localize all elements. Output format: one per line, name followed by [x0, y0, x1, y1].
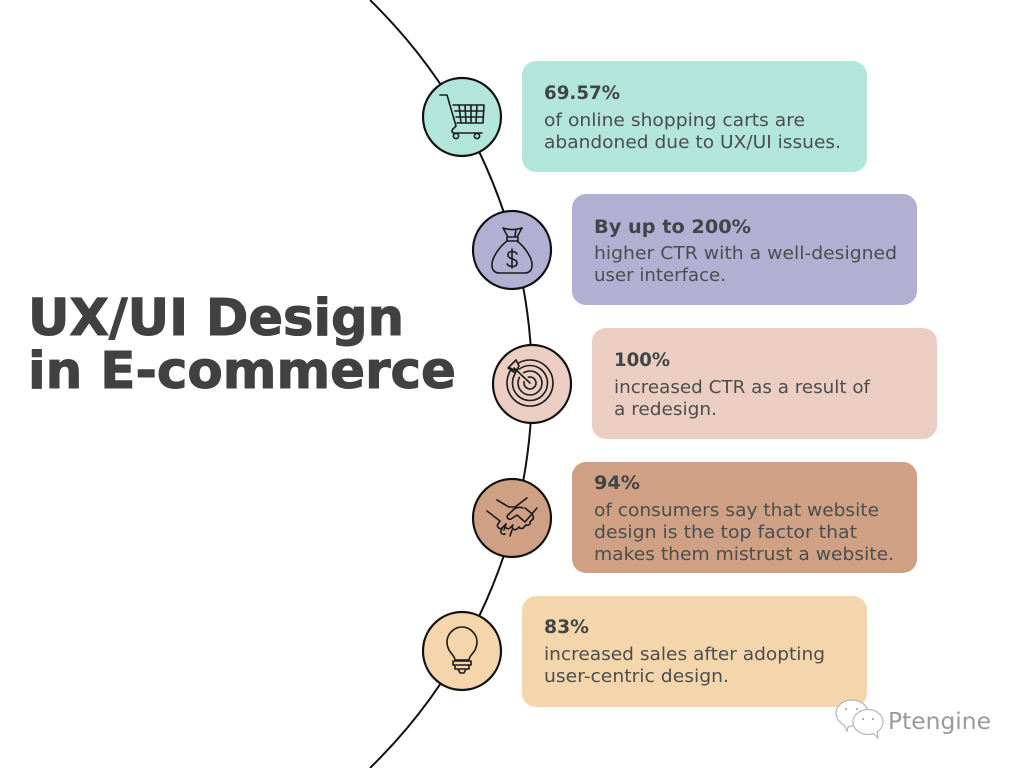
panel: cart abandonment: 69.57% [544, 82, 620, 104]
panel: higher CTR [572, 194, 917, 305]
panel: cart abandonment: of online shopping carts are [544, 111, 805, 131]
panel: higher CTR: By up to 200% [594, 216, 751, 238]
panel: consumer mistrust: 94% [594, 472, 640, 494]
title: in E-commerce [28, 342, 456, 401]
title: UX/UI Design [28, 289, 404, 348]
icon: shopping cart [423, 78, 501, 156]
icon: money bag [473, 211, 551, 289]
panel: increased sales: user-centric design. [544, 667, 729, 687]
panel: increased sales: 83% [544, 616, 589, 638]
panel: consumer mistrust: of consumers say that website [594, 501, 879, 521]
panel: redesign CTR: 100% [614, 349, 670, 371]
panel: higher CTR: user interface. [594, 266, 726, 286]
panel: redesign CTR: a redesign. [614, 400, 717, 420]
title [28, 289, 456, 401]
panel: increased sales: increased sales after adopting [544, 645, 825, 665]
panel: cart abandonment: abandoned due to UX/UI issues. [544, 133, 841, 153]
panel: redesign CTR: increased CTR as a result of [614, 378, 871, 398]
panel: consumer mistrust [572, 462, 917, 573]
icon: target with arrow [493, 345, 571, 423]
panel: cart abandonment [522, 61, 867, 172]
panel: redesign CTR [592, 328, 937, 439]
panel: increased sales [522, 596, 867, 707]
icon: light bulb [423, 612, 501, 690]
icon: handshake [473, 479, 551, 557]
main curved arc [370, 0, 532, 768]
watermark: Ptengine: Ptengine [888, 709, 991, 735]
watermark: Ptengine [836, 700, 991, 738]
panel: consumer mistrust: makes them mistrust a website. [594, 545, 894, 565]
panel: higher CTR: higher CTR with a well-designed [594, 244, 897, 264]
panel: consumer mistrust: design is the top factor that [594, 523, 857, 543]
